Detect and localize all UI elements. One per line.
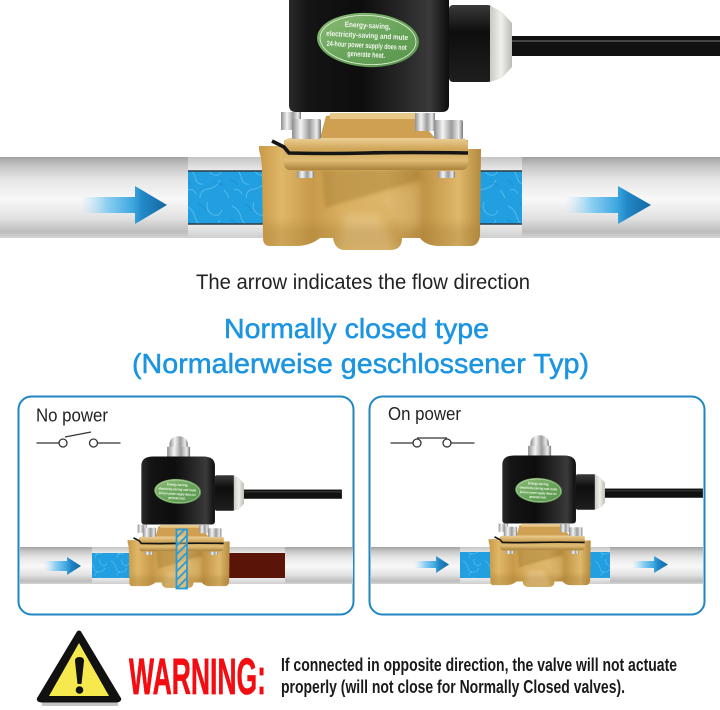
closed switch symbol (390, 438, 474, 447)
on power label: On power (388, 404, 461, 424)
heading: (Normalerweise geschlossener Typ) (132, 348, 589, 379)
warning row (39, 633, 677, 706)
warning text: properly (will not close for Normally Closed valves). (281, 677, 625, 697)
heading (132, 313, 589, 379)
inlet arrow (44, 557, 81, 575)
pipe with water after valve (588, 547, 703, 584)
valve closed (128, 436, 342, 588)
panel: on power (370, 396, 704, 614)
outlet arrow (632, 556, 668, 573)
right inner pipe (478, 157, 522, 238)
warning text (281, 655, 677, 697)
hatched plunger (176, 530, 187, 588)
panel: no power (18, 396, 354, 614)
top pipe assembly (0, 157, 720, 238)
left pipe section (0, 157, 188, 238)
right water section (478, 171, 522, 224)
right flow arrow (565, 186, 651, 224)
pipe with blocked section after valve (228, 547, 353, 584)
large valve (259, 0, 720, 250)
flow direction caption: The arrow indicates the flow direction (196, 270, 530, 294)
left flow arrow (80, 186, 167, 224)
valve open (489, 435, 703, 587)
inlet arrow (414, 556, 449, 573)
heading: Normally closed type (224, 313, 489, 344)
no power label: No power (36, 406, 108, 426)
open switch symbol (36, 432, 120, 447)
left water section (188, 171, 263, 224)
warning word: WARNING: (129, 648, 266, 705)
pipe with water before valve (20, 547, 132, 584)
left inner pipe (188, 157, 263, 238)
icon: warning triangle (39, 633, 119, 706)
right pipe section (522, 157, 720, 238)
pipe with water before valve (371, 547, 492, 584)
